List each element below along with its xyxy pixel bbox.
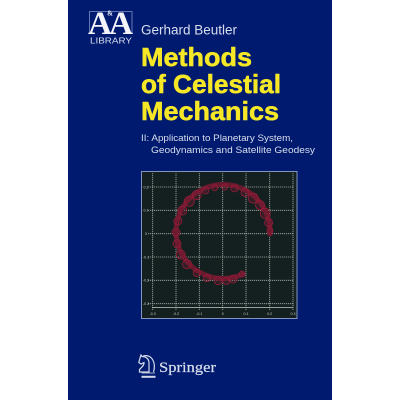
x axis — [152, 306, 293, 308]
axis labels: -0.2 — [173, 312, 179, 316]
subtitle: Geodynamics and Satellite Geodesy — [151, 145, 315, 156]
axis labels: 0.2 — [267, 312, 272, 316]
axis labels: -0.3 — [150, 312, 156, 316]
orbit plot — [142, 172, 297, 318]
axis labels: 0.1 — [144, 208, 148, 212]
axis labels: 0.2 — [144, 186, 148, 190]
A&A Library logo: A — [88, 6, 112, 42]
axis labels: -0.3 — [143, 302, 149, 306]
axis labels — [143, 186, 296, 316]
red orbit ring — [172, 184, 273, 285]
plot frame — [142, 172, 297, 318]
axis labels: 0.3 — [290, 312, 296, 316]
axis labels: -0.1 — [196, 312, 202, 316]
title: Methods — [141, 42, 252, 72]
author name: Gerhard Beutler — [141, 22, 237, 38]
axis labels: 0 — [222, 312, 224, 316]
grid lines — [148, 173, 294, 310]
A&A Library logo: LIBRARY — [90, 36, 133, 46]
title: Mechanics — [141, 96, 279, 126]
axis labels: 0 — [145, 232, 147, 236]
title: of Celestial — [141, 69, 281, 99]
subtitle: II: Application to Planetary System, — [141, 133, 293, 144]
subtitle — [141, 133, 315, 156]
A&A Library logo — [88, 6, 133, 46]
axis labels: 0.1 — [244, 312, 248, 316]
title — [141, 42, 281, 126]
cover background — [68, 0, 332, 400]
A&A Library logo: & — [107, 10, 113, 18]
axis labels: -0.2 — [143, 278, 149, 282]
icon: Springer horse — [139, 355, 156, 377]
publisher name: Springer — [159, 360, 216, 376]
A&A Library logo: A — [109, 6, 133, 42]
axis labels: -0.1 — [143, 256, 149, 260]
